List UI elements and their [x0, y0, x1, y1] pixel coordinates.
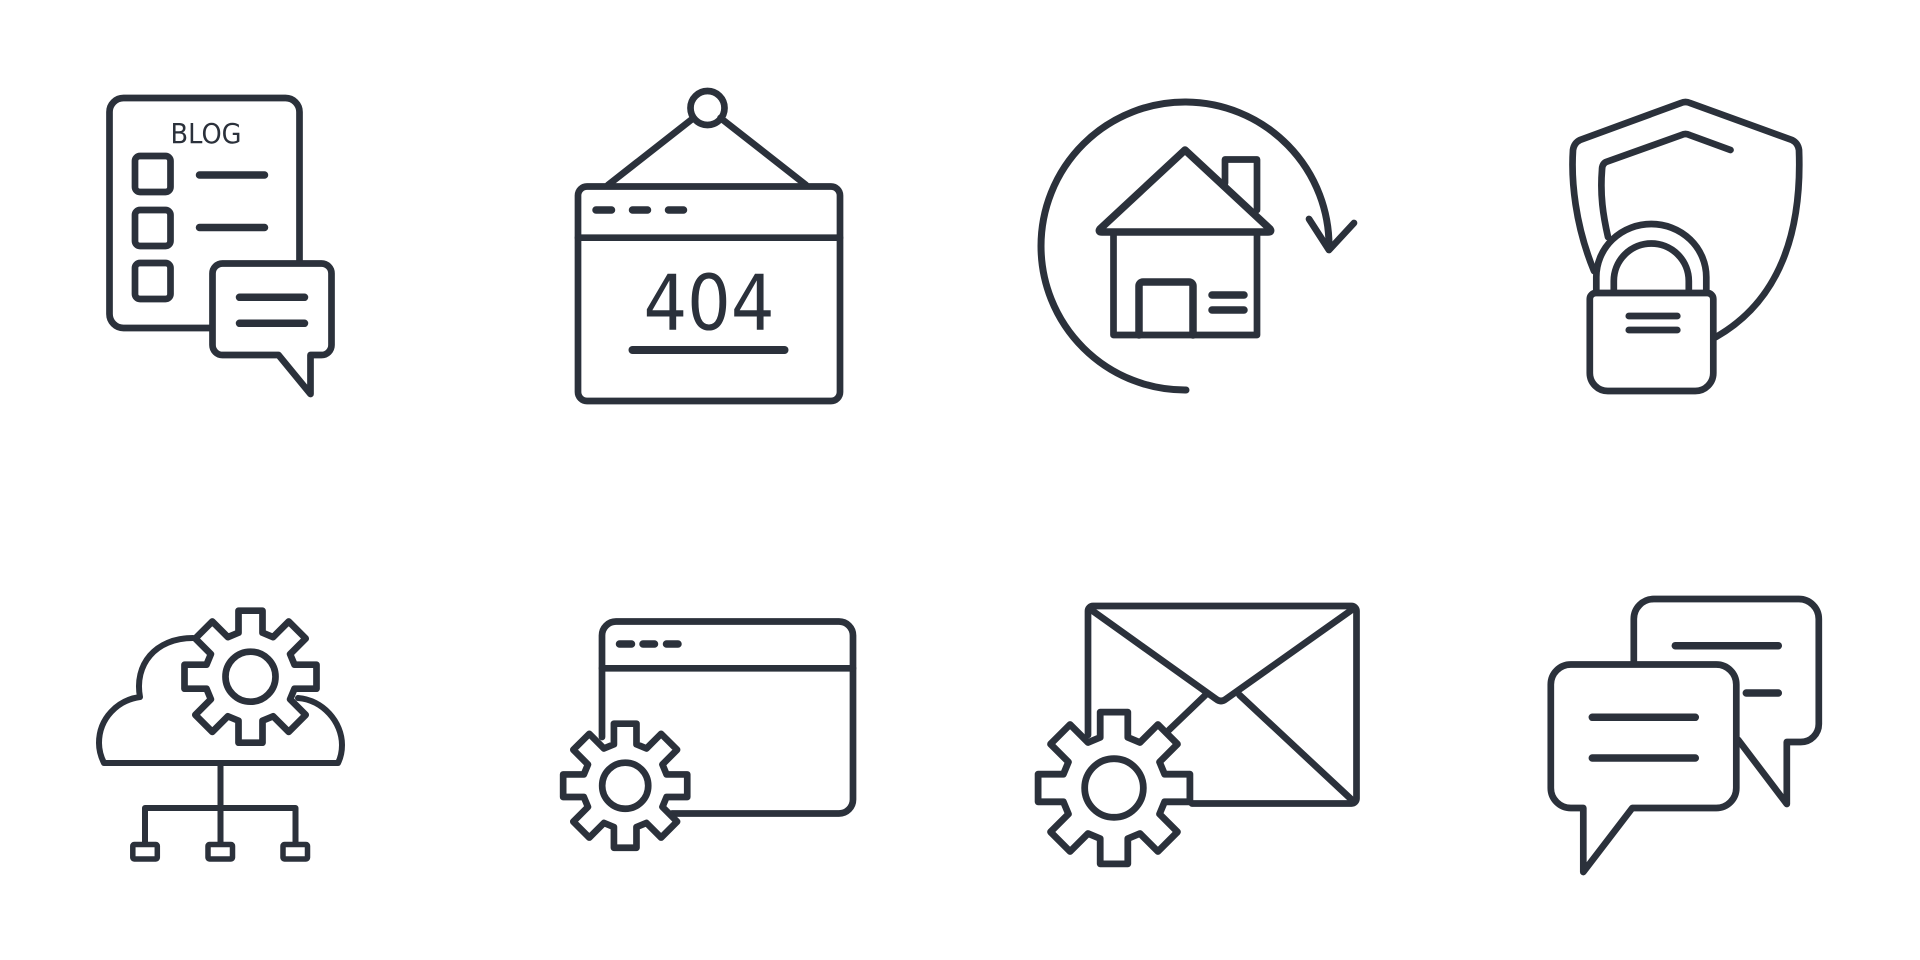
checklist boxes	[135, 156, 264, 299]
outer shield	[1573, 102, 1799, 337]
browser window outline	[602, 622, 853, 814]
icon: browser window settings	[563, 622, 853, 848]
window header	[578, 210, 840, 238]
icon: chat bubbles	[1551, 599, 1819, 872]
keyhole lines	[1629, 316, 1677, 330]
house walls	[1114, 232, 1257, 335]
icon: cloud settings network	[99, 611, 342, 859]
icon: shield with padlock	[1573, 102, 1799, 391]
404 text: 404	[644, 260, 774, 348]
padlock shackle	[1596, 224, 1706, 293]
cloud outline	[99, 638, 342, 763]
back bubble lines	[1675, 646, 1778, 693]
envelope flap	[1090, 609, 1353, 701]
gear	[184, 611, 316, 743]
underline	[632, 346, 784, 354]
gear	[563, 724, 687, 848]
gear	[1038, 712, 1190, 864]
chimney	[1225, 160, 1257, 210]
padlock	[1590, 224, 1713, 391]
inner shield	[1601, 134, 1730, 237]
blog heading: BLOG	[170, 117, 242, 150]
front bubble lines	[1592, 717, 1695, 758]
front speech bubble	[1551, 664, 1736, 872]
icon: home with circular arrow	[1041, 102, 1354, 390]
icon: 404 hanging sign	[578, 91, 840, 401]
network tree	[145, 763, 296, 842]
comment bubble	[212, 264, 332, 394]
envelope lower folds	[1169, 695, 1352, 800]
hanging string	[608, 118, 806, 185]
padlock body	[1590, 293, 1713, 391]
icon: email settings	[1038, 606, 1356, 864]
hanging pin	[690, 91, 724, 125]
network nodes	[133, 844, 308, 859]
window header	[602, 644, 853, 668]
envelope outline	[1088, 606, 1356, 804]
browser window	[578, 186, 840, 401]
house roof	[1099, 150, 1271, 232]
icon: blog page with comment	[110, 98, 332, 394]
back speech bubble	[1634, 599, 1819, 804]
door	[1139, 282, 1193, 335]
blog document outline	[110, 98, 300, 328]
window lines	[1212, 295, 1244, 310]
circular arrow	[1041, 102, 1354, 390]
